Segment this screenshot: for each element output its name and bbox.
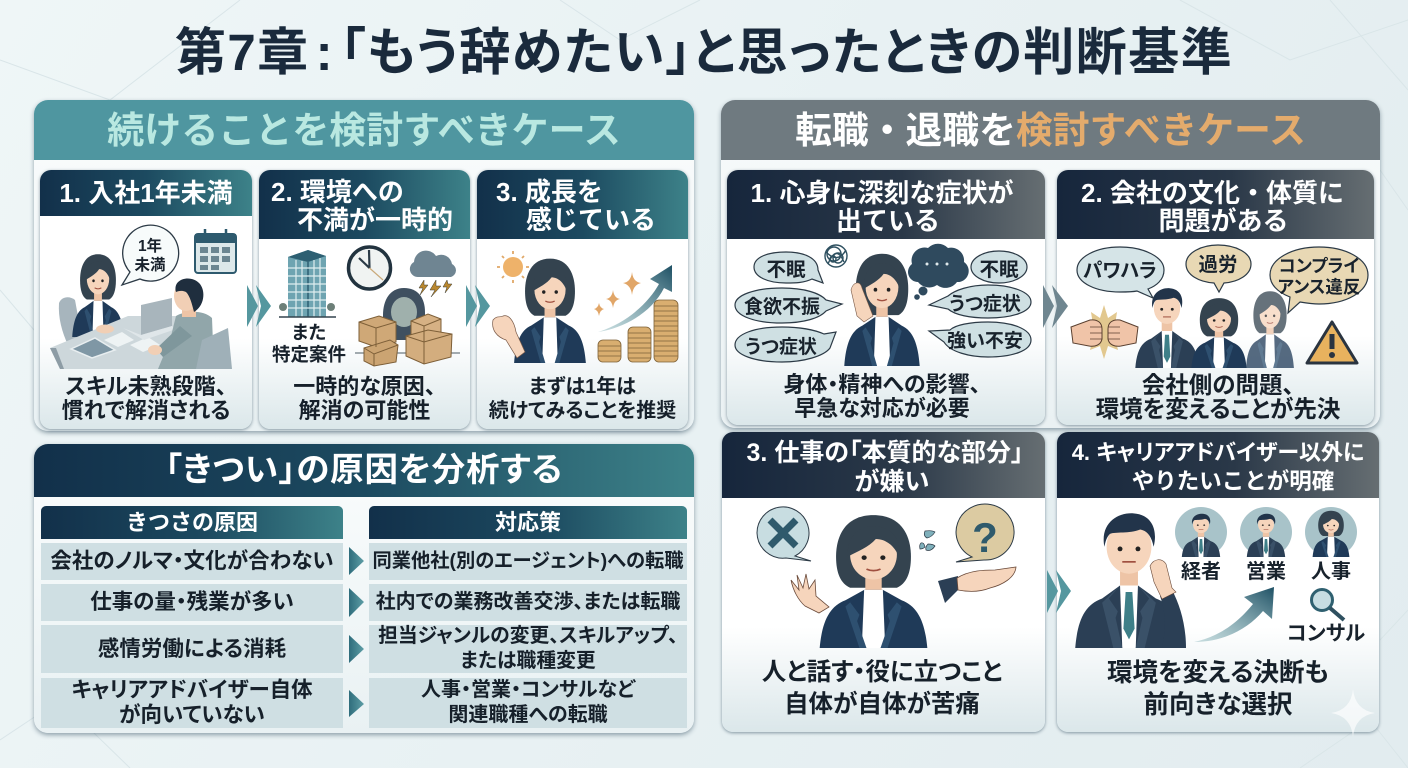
- icon: storm cloud: [410, 251, 456, 297]
- avatar: manager: 経者: [1181, 560, 1221, 583]
- card heading: 不満が一時的: [297, 205, 453, 235]
- person: confused woman: [820, 515, 927, 648]
- column heading: countermeasures: [369, 506, 687, 539]
- bubble: depression left: うつ症状: [745, 336, 817, 358]
- bubble: insomnia right: [971, 251, 1027, 283]
- right open hand: [938, 567, 1016, 603]
- card caption: 環境を変える決断も: [1107, 659, 1329, 687]
- watermark sparkle: [1332, 691, 1374, 736]
- card heading: [1057, 170, 1374, 239]
- card: 3 feeling growth: [477, 170, 688, 429]
- solution row 4: [369, 678, 687, 728]
- bubble: question mark: [956, 504, 1014, 562]
- solution row 2: [369, 584, 687, 621]
- card caption: [293, 374, 436, 423]
- person: thinking man: [1075, 513, 1186, 648]
- card caption: 続けてみることを推奨: [489, 400, 676, 422]
- people: three colleagues: [1135, 288, 1294, 368]
- card caption: 会社側の問題、: [1142, 372, 1294, 398]
- card heading: [477, 170, 688, 239]
- card caption: 自体が自体が苦痛: [784, 691, 980, 718]
- panel heading bar: [721, 100, 1380, 160]
- solution row 4: 関連職種への転職: [448, 704, 608, 726]
- card: 3 dislike essence of job: [722, 432, 1045, 732]
- bubble: insomnia left: 不眠: [766, 259, 806, 281]
- panel heading bar: [34, 100, 694, 160]
- cause row 4: キャリアアドバイザー自体: [71, 678, 313, 702]
- card caption: 慣れで解消される: [62, 398, 230, 423]
- arrow: card 1 to 2: [247, 285, 271, 327]
- bubble: question mark: ?: [972, 514, 998, 561]
- speech bubble: under one year: [122, 225, 179, 285]
- bubble: overwork: 過労: [1198, 254, 1238, 276]
- solution row 1: [369, 543, 687, 580]
- icon: calendar: [195, 229, 236, 273]
- arrow: right panel bottom: [1047, 570, 1071, 613]
- card heading: [40, 170, 252, 216]
- text: specific project: また: [292, 322, 326, 343]
- card heading: [259, 170, 470, 239]
- bubble: loss of appetite: [735, 288, 842, 323]
- bubble: compliance violation: アンス違反: [1278, 277, 1360, 297]
- card caption: [489, 376, 676, 422]
- title: 第7章:「もう辞めたい」と思ったときの判断基準: [175, 24, 1233, 81]
- column heading: causes: [41, 506, 343, 539]
- panel heading: 「きつい」の原因を分析する: [165, 452, 563, 489]
- card caption: 早急な対応が必要: [794, 396, 970, 421]
- panel heading: 転職・退職を検討すべきケース: [795, 110, 1306, 151]
- stack of cardboard boxes: [359, 314, 452, 366]
- card heading: 1. 心身に深刻な症状が: [751, 178, 1013, 208]
- card caption: 人と話す・役に立つこと: [762, 659, 1002, 686]
- coin stacks: [598, 300, 678, 362]
- speech bubble: under one year: 1年: [138, 236, 162, 255]
- arrow: card 2 to 3: [466, 285, 490, 327]
- cause row 4: が向いていない: [119, 703, 265, 727]
- card caption: [1107, 659, 1329, 719]
- card heading: 感じている: [526, 205, 656, 235]
- cause row 3: 感情労働による消耗: [98, 636, 286, 660]
- bubble: strong anxiety: 強い不安: [947, 330, 1023, 352]
- cause row 2: [41, 584, 343, 621]
- card heading: が嫌い: [854, 468, 930, 496]
- icon: office building: [279, 250, 336, 317]
- avatar: sales: 営業: [1246, 560, 1286, 583]
- card heading: [722, 432, 1045, 498]
- card: 4 clear other goal: [1057, 432, 1379, 732]
- bubble: insomnia left: [754, 252, 823, 283]
- cause row 3: [41, 625, 343, 673]
- speech bubble: under one year: 未満: [134, 256, 166, 274]
- bubble: strong anxiety: [929, 322, 1031, 357]
- card caption: スキル未熟段階、: [65, 374, 227, 399]
- illustration: career options: [1075, 507, 1365, 648]
- bubble: overwork: [1186, 245, 1251, 292]
- panel heading: [34, 444, 694, 497]
- sparkles: [594, 272, 641, 316]
- card caption: 一時的な原因、: [293, 374, 436, 399]
- bubble: compliance violation: [1270, 247, 1368, 313]
- card caption: [62, 374, 230, 423]
- arrow: right panel top: [1043, 285, 1068, 328]
- illustration: confused woman: [756, 504, 1016, 648]
- left raised hand: [791, 574, 829, 613]
- solution row 2: 社内での業務改善交渉、または転職: [376, 591, 680, 613]
- card caption: [762, 659, 1002, 718]
- icon: warning triangle: [1307, 322, 1357, 363]
- bubble: power harassment: パワハラ: [1083, 260, 1157, 282]
- avatar: HR: [1305, 507, 1357, 583]
- icon: clock: [348, 247, 390, 289]
- panel: change job cases: [721, 100, 1380, 428]
- column heading: countermeasures: 対応策: [495, 510, 561, 535]
- illustration: consultation at desk: [50, 224, 237, 369]
- bubble: power harassment: [1077, 247, 1164, 298]
- card: 2 company culture: [1057, 170, 1374, 425]
- illustration: building, clock, storm and boxes: [272, 245, 460, 366]
- avatar: sales: [1240, 507, 1292, 583]
- avatar: manager: [1175, 507, 1227, 583]
- column heading: causes: きつさの原因: [126, 510, 258, 535]
- card caption: 環境を変えることが先決: [1096, 396, 1340, 422]
- card heading: 出ている: [836, 206, 940, 236]
- card caption: [783, 372, 981, 421]
- card heading: [1057, 432, 1379, 498]
- card caption: 前向きな選択: [1144, 691, 1292, 719]
- card: 1 under one year: [40, 170, 252, 429]
- card heading: 2. 環境への: [271, 177, 404, 207]
- icon: dark thought cloud: [908, 244, 969, 300]
- chevrons: cause to solution: [349, 547, 364, 717]
- solution row 1: 同業他社(別のエージェント)への転職: [372, 551, 684, 572]
- bubble: insomnia right: 不眠: [979, 259, 1019, 281]
- text: consulting: コンサル: [1287, 622, 1365, 645]
- panel heading: 続けることを検討すべきケース: [107, 110, 621, 151]
- text: specific project: [272, 322, 346, 365]
- bubble: depression right: [929, 285, 1031, 318]
- bubble: compliance violation: コンプライ: [1279, 256, 1359, 276]
- avatar: HR: 人事: [1311, 560, 1351, 583]
- solution row 3: 担当ジャンルの変更、スキルアップ、: [378, 625, 678, 647]
- card caption: まずは1年は: [529, 376, 636, 398]
- cause row 1: 会社のノルマ・文化が合わない: [50, 549, 334, 573]
- card heading: 2. 会社の文化・体質に: [1081, 178, 1344, 208]
- card heading: [727, 170, 1045, 239]
- cause row 4: [41, 678, 343, 728]
- person: troubled woman: [844, 254, 920, 366]
- upward arrow: [1194, 587, 1274, 642]
- cause row 1: [41, 543, 343, 580]
- text: specific project: 特定案件: [272, 344, 346, 365]
- solution row 3: [369, 625, 687, 673]
- bubble: depression right: うつ症状: [949, 293, 1021, 315]
- icon: tangled thought: [825, 245, 847, 267]
- solution row 4: 人事・営業・コンサルなど: [421, 679, 635, 701]
- card caption: 解消の可能性: [299, 398, 430, 423]
- bubble: cross mark: [757, 507, 811, 561]
- icon: clashing fists: [1071, 305, 1138, 359]
- sweat drops: [920, 531, 935, 550]
- card: 1 serious symptoms: [727, 170, 1045, 425]
- card heading: 4. キャリアアドバイザー以外に: [1072, 440, 1364, 465]
- panel: cause analysis: [34, 444, 694, 733]
- card heading: 3. 成長を: [496, 177, 603, 207]
- illustration: workplace problems: [1070, 244, 1369, 368]
- panel: continue cases: [34, 100, 694, 431]
- card: 2 temporary dissatisfaction: [259, 170, 470, 429]
- solution row 3: または職種変更: [460, 650, 596, 672]
- bubble: loss of appetite: 食欲不振: [744, 296, 820, 318]
- bubble: depression left: [735, 327, 836, 362]
- person: smiling woman: [514, 259, 586, 363]
- hand gesture: [493, 316, 525, 358]
- illustration: growth with coins: [492, 251, 678, 363]
- cause row 2: 仕事の量・残業が多い: [90, 590, 294, 614]
- person hidden behind boxes: [383, 288, 425, 340]
- illustration: symptoms: [734, 244, 1032, 366]
- card caption: 身体・精神への影響、: [783, 372, 981, 397]
- card caption: [1096, 372, 1340, 422]
- card heading: やりたいことが明確: [1132, 469, 1334, 494]
- card heading: 1. 入社1年未満: [59, 178, 233, 208]
- icon: magnifier: [1312, 590, 1344, 620]
- growth arrow: [598, 265, 672, 332]
- icon: sun: [497, 251, 529, 283]
- card heading: 3. 仕事の「本質的な部分」: [747, 439, 1023, 467]
- card heading: 問題がある: [1158, 206, 1288, 236]
